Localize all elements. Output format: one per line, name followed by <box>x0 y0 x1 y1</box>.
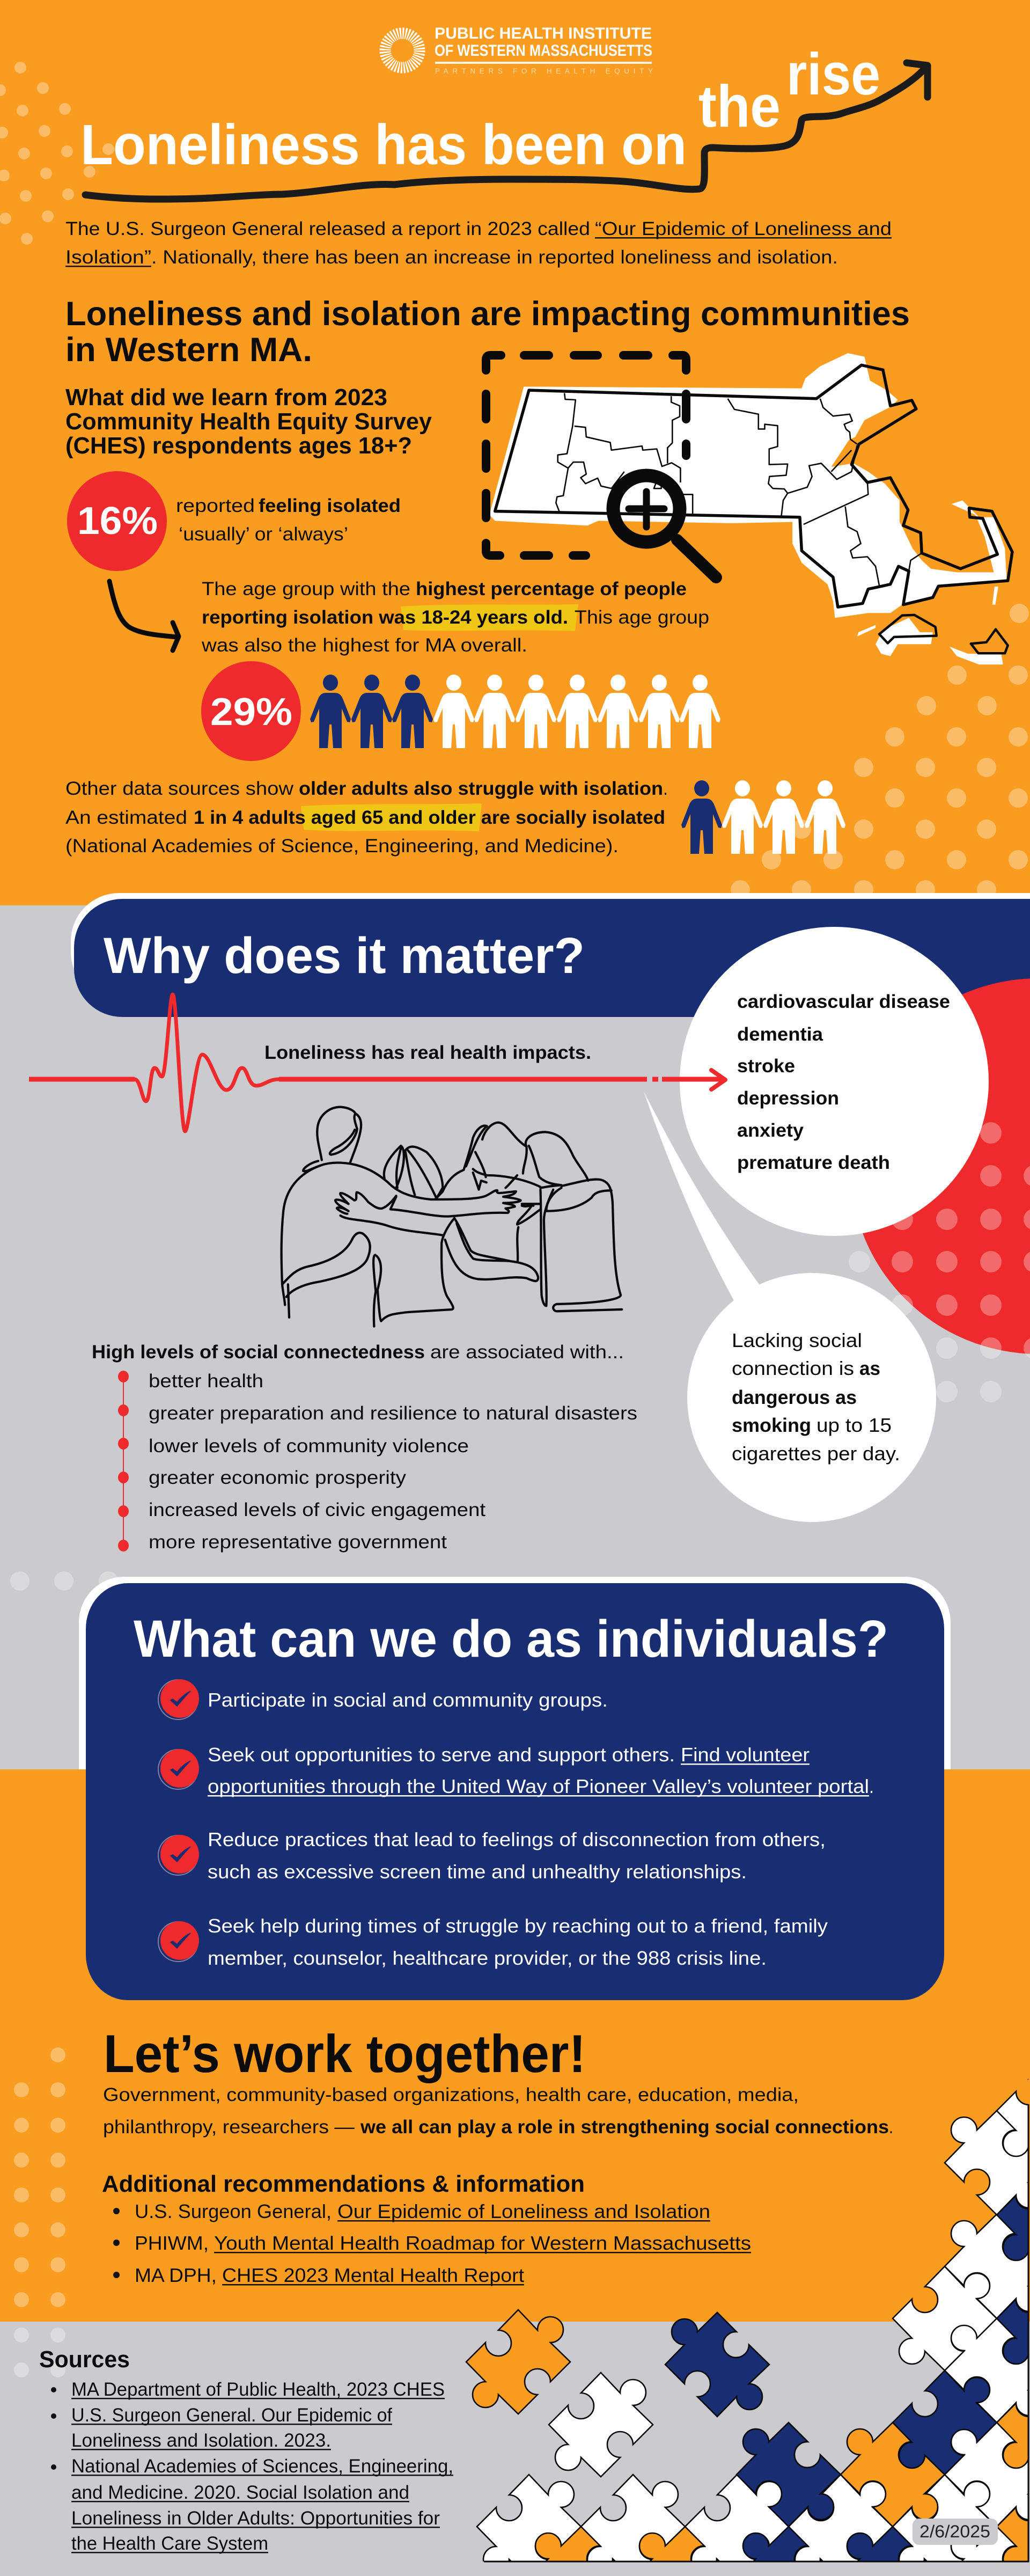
text: social connectedness intro: High levels of social connectedness <box>92 1342 425 1363</box>
map state outline <box>495 365 1012 607</box>
bubble: smoking comparison: Lacking social <box>732 1329 862 1351</box>
title with rising arrow <box>80 41 928 199</box>
list: benefits of social connectedness: greater economic prosperity <box>149 1467 407 1488</box>
bubble: smoking comparison <box>687 1273 936 1522</box>
dot pattern over red circle <box>849 1122 1030 1402</box>
bubble: smoking comparison: as <box>859 1357 880 1379</box>
text: highest percent age group: was also the highest for MA overall. <box>201 635 527 656</box>
map white fill <box>489 353 1007 618</box>
icon row: 3 of 10 people <box>310 675 720 748</box>
stat: 16 percent <box>67 471 167 571</box>
map of Massachusetts counties <box>489 353 1012 664</box>
text: 16 percent description: feeling isolated <box>259 495 401 516</box>
list timeline <box>118 1371 129 1552</box>
list: benefits of social connectedness <box>118 1371 637 1553</box>
text: older adults <box>65 778 668 857</box>
action 3 <box>208 1828 826 1883</box>
logo: Public Health Institute of Western Massachusetts: PUBLIC HEALTH INSTITUTE <box>435 25 652 42</box>
text: all can play a role: Government, community-based organizations, health care, education, media, <box>103 2084 799 2105</box>
map county lines <box>556 393 922 586</box>
background orange lower section <box>0 1769 1030 2322</box>
stat: 29 percent <box>201 661 301 761</box>
date stamp: 2/6/2025 <box>919 2522 990 2541</box>
highlight: aged 65 and older <box>301 803 482 831</box>
intro paragraph: . Nationally, there has been an increase in reported loneliness and isolation. <box>151 247 838 268</box>
heartbeat arrow <box>29 994 725 1131</box>
text: older adults: . <box>663 778 668 799</box>
background orange top section <box>0 0 1030 905</box>
sources: Loneliness and Isolation. 2023. <box>71 2430 331 2451</box>
heading: let's work together: Let’s work together! <box>104 2024 586 2083</box>
text: highest percent age group <box>201 579 709 656</box>
bubble: health impacts list: stroke <box>737 1056 795 1077</box>
bubble: smoking comparison: smoking <box>732 1414 811 1436</box>
panel: what can we do as individuals <box>79 1577 951 2000</box>
additional recommendations: U.S. Surgeon General, <box>135 2200 332 2222</box>
red circle with dots behind bubbles <box>849 978 1030 1402</box>
text: older adults: An estimated <box>65 807 187 828</box>
section heading: impact on Western MA <box>65 295 910 369</box>
intro paragraph <box>65 218 892 268</box>
puzzle frame lines <box>484 2104 1028 2562</box>
arrow: rising squiggle <box>85 67 926 199</box>
icon: check 1 <box>158 1679 199 1719</box>
additional recommendations: Youth Mental Health Roadmap for Western Massachusetts <box>214 2232 751 2254</box>
text: 16 percent description: reported <box>176 495 255 516</box>
intro paragraph: The U.S. Surgeon General released a report in 2023 called <box>65 218 590 239</box>
bubble: smoking comparison: up to 15 <box>816 1414 892 1436</box>
list: benefits of social connectedness: greater preparation and resilience to natural disasters <box>149 1403 637 1424</box>
additional recommendations: CHES 2023 Mental Health Report <box>222 2264 524 2286</box>
bubble: smoking comparison: cigarettes per day. <box>732 1443 900 1465</box>
additional recommendations: Our Epidemic of Loneliness and Isolation <box>337 2200 710 2222</box>
intro paragraph: “Our Epidemic of Loneliness and <box>595 218 892 239</box>
action 2: opportunities through the United Way of Pioneer Valley’s volunteer portal <box>208 1775 869 1797</box>
action 2: Seek out opportunities to serve and support others. <box>208 1744 675 1766</box>
list: benefits of social connectedness: increased levels of civic engagement <box>149 1499 485 1520</box>
additional recommendations: MA DPH, <box>135 2264 217 2286</box>
list: benefits of social connectedness: more representative government <box>149 1532 447 1553</box>
sources: the Health Care System <box>71 2533 268 2554</box>
section heading: impact on Western MA: Loneliness and isolation are impacting communities <box>65 295 910 333</box>
bubble: health impacts list <box>680 927 989 1236</box>
banner: why does it matter <box>71 893 1030 1017</box>
additional recommendations <box>102 2171 751 2286</box>
sources: Sources <box>39 2346 130 2373</box>
subheading: survey question: (CHES) respondents ages 18+? <box>65 433 412 459</box>
text: all can play a role: we all can play a role in strengthening social connections <box>360 2117 889 2138</box>
icon: check 4 <box>158 1921 199 1962</box>
logo: Public Health Institute of Western Massachusetts: PARTNERS FOR HEALTH EQUITY <box>435 67 653 75</box>
additional recommendations: Additional recommendations & information <box>102 2171 585 2197</box>
action 2: . <box>869 1775 874 1797</box>
text: all can play a role: philanthropy, researchers — <box>103 2117 355 2138</box>
bubble: health impacts list: premature death <box>737 1152 890 1173</box>
action 3: such as excessive screen time and unhealthy relationships. <box>208 1861 747 1883</box>
logo: Public Health Institute of Western Massachusetts: OF WESTERN MASSACHUSETTS <box>435 42 652 60</box>
puzzle pieces illustration <box>466 2059 1030 2576</box>
date stamp <box>913 2519 998 2545</box>
dot pattern lower left <box>14 2047 65 2377</box>
action 4: Seek help during times of struggle by reaching out to a friend, family <box>208 1915 828 1937</box>
action 2 <box>208 1744 874 1797</box>
dashed selection rectangle over western MA <box>486 355 686 555</box>
sources <box>39 2346 453 2554</box>
section heading: impact on Western MA: in Western MA. <box>65 331 312 369</box>
sources: MA Department of Public Health, 2023 CHES <box>71 2379 445 2400</box>
bubble: health impacts list: anxiety <box>737 1120 804 1141</box>
text: all can play a role <box>103 2084 893 2138</box>
text: 16 percent description: ‘usually’ or ‘always’ <box>179 524 348 545</box>
bubble: health impacts list: cardiovascular disease <box>737 991 950 1012</box>
dot pattern lower right of orange section <box>731 604 1029 899</box>
subheading: survey question: What did we learn from 2023 <box>65 384 387 411</box>
dot pattern above panel <box>10 1571 118 1591</box>
icon: sunburst <box>385 33 420 68</box>
text: all can play a role: . <box>889 2117 893 2138</box>
arrow head <box>907 63 928 97</box>
list: benefits of social connectedness: lower levels of community violence <box>149 1436 469 1457</box>
title with rising arrow: Loneliness has been on <box>80 113 687 177</box>
highlight: 18-24 years old <box>401 604 578 631</box>
title with rising arrow: the <box>698 74 781 140</box>
bubble: health impacts list: dementia <box>737 1024 823 1045</box>
bubble: smoking comparison: dangerous as <box>732 1386 857 1408</box>
sources: Loneliness in Older Adults: Opportunities for <box>71 2508 440 2529</box>
sources: U.S. Surgeon General. Our Epidemic of <box>71 2405 392 2426</box>
bubble: smoking comparison: connection is <box>732 1357 854 1379</box>
map islands white fill <box>857 587 1003 664</box>
logo: Public Health Institute of Western Massachusetts <box>385 25 653 75</box>
intro paragraph: Isolation” <box>65 247 151 268</box>
map islands outline <box>879 615 1008 653</box>
text: highest percent age group: The age group with the <box>202 579 410 599</box>
text: social connectedness intro: are associated with... <box>430 1342 624 1363</box>
dot pattern top left <box>0 62 114 245</box>
stat: 16 percent: 16% <box>77 500 158 543</box>
text: older adults: older adults also struggle with isolation <box>299 778 663 799</box>
callout tail <box>644 1092 762 1301</box>
text: highest percent age group: This age group <box>575 607 709 628</box>
text: highest percent age group: highest percentage of people <box>416 579 687 599</box>
panel heading: What can we do as individuals? <box>134 1609 888 1668</box>
text: older adults: 1 in 4 adults aged 65 and older are socially isolated <box>194 807 665 828</box>
action 3: Reduce practices that lead to feelings of disconnection from others, <box>208 1828 826 1850</box>
icon: check 2 <box>158 1749 199 1789</box>
action 2: Find volunteer <box>681 1744 810 1766</box>
text: highest percent age group: reporting isolation was 18-24 years old. <box>202 607 568 628</box>
list: benefits of social connectedness: better health <box>149 1371 263 1392</box>
action 4 <box>208 1915 828 1969</box>
stat: 29 percent: 29% <box>210 691 292 734</box>
arrow: curved from 16 percent to age group text <box>109 581 179 650</box>
action 4: member, counselor, healthcare provider, or the 988 crisis line. <box>208 1947 767 1969</box>
additional recommendations: PHIWM, <box>135 2232 209 2254</box>
text: older adults: (National Academies of Science, Engineering, and Medicine). <box>65 836 619 857</box>
banner: why does it matter: Why does it matter? <box>104 927 585 984</box>
text: real health impacts: Loneliness has real health impacts. <box>264 1042 591 1063</box>
illustration: line drawing of people embracing <box>282 1107 622 1327</box>
background gray sources section <box>0 2322 1030 2576</box>
icon row: 1 of 4 people <box>681 780 845 854</box>
icon: check 3 <box>158 1835 199 1875</box>
text: 16 percent description <box>176 495 401 545</box>
sources: and Medicine. 2020. Social Isolation and <box>71 2482 409 2503</box>
icon: magnifying glass <box>613 475 716 577</box>
background gray middle section <box>0 905 1030 1769</box>
text: older adults: Other data sources show <box>65 778 294 799</box>
subheading: survey question <box>65 384 432 459</box>
subheading: survey question: Community Health Equity Survey <box>65 408 432 435</box>
sources: National Academies of Sciences, Engineering, <box>71 2456 453 2477</box>
bubble: health impacts list: depression <box>737 1088 839 1109</box>
text: social connectedness intro <box>92 1342 624 1363</box>
action 1: Participate in social and community groups. <box>208 1689 608 1711</box>
title with rising arrow: rise <box>786 41 880 107</box>
